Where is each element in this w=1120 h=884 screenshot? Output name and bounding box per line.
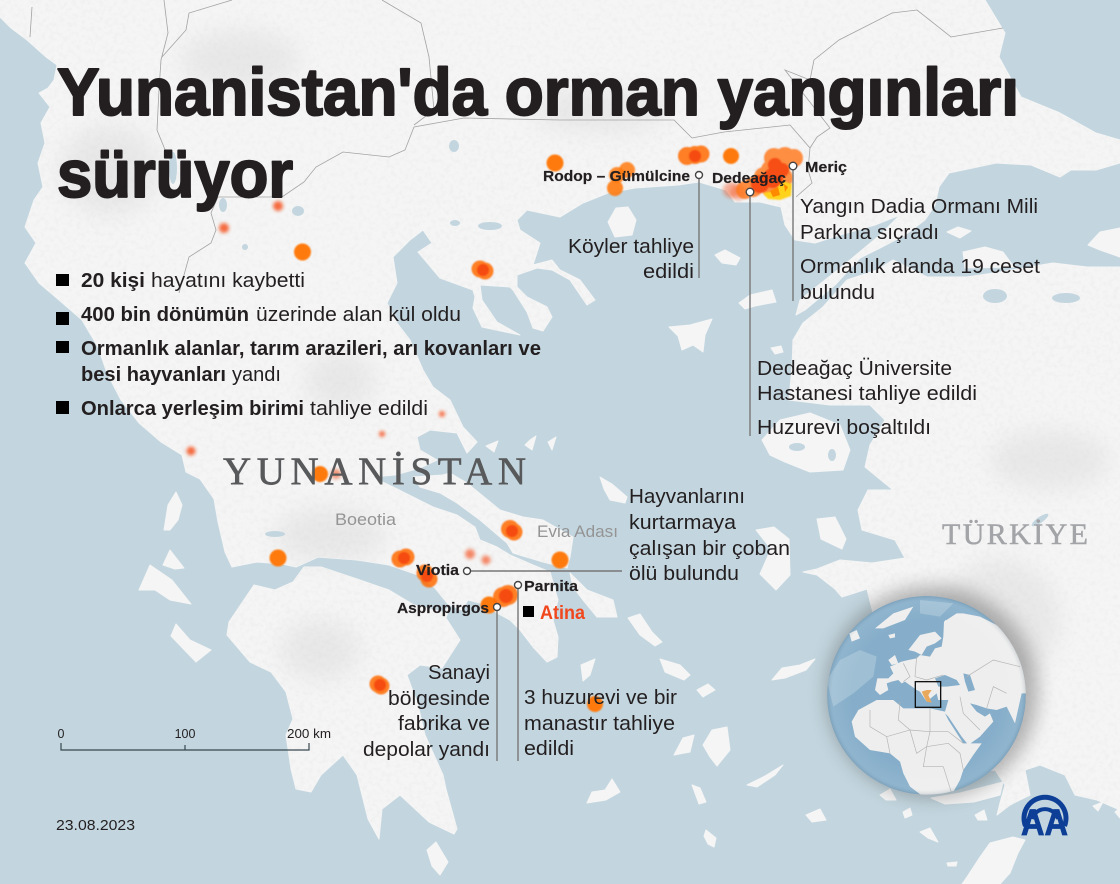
- bullet list: besi hayvanları: [81, 364, 226, 386]
- bullet list: yandı: [232, 364, 281, 386]
- scale bar: [58, 727, 331, 750]
- date: 23.08.2023: [56, 818, 135, 834]
- bullet list: hayatını kaybetti: [151, 270, 305, 292]
- callout: Aspropirgos: depolar yandı: [363, 739, 490, 761]
- callout: Meriç: Meriç: [805, 159, 847, 176]
- callout: Parnita: Parnita: [524, 578, 579, 595]
- bullet list: 400 bin dönümün: [81, 304, 249, 326]
- callout: Dedeağaç: Huzurevi boşaltıldı: [757, 417, 931, 439]
- callout: Aspropirgos: bölgesinde: [388, 688, 490, 710]
- callout: Viotia: ölü bulundu: [629, 563, 739, 585]
- fire hotspots: [186, 146, 803, 712]
- callout: Viotia: Viotia: [416, 562, 460, 579]
- bullet list: 20 kişi: [81, 270, 145, 292]
- callout: Dedeağaç: Dedeağaç Üniversite: [757, 358, 952, 380]
- Anadolu Agency logo: AA: [1021, 802, 1068, 843]
- callout: Parnita: manastır tahliye: [524, 713, 675, 735]
- bullet list: Onlarca yerleşim birimi: [81, 398, 304, 420]
- locator globe: [826, 586, 1038, 798]
- bullet list: tahliye edildi: [310, 398, 428, 420]
- callout: Parnita: edildi: [524, 738, 574, 760]
- scale bar: 0: [58, 727, 65, 741]
- callout: Rodop – Gümülcine: Köyler tahliye: [568, 236, 694, 258]
- region label: Evia Adası: Evia Adası: [537, 522, 618, 541]
- map: country borders: [30, 0, 1003, 293]
- title: Yunanistan'da orman yangınları: [57, 55, 1019, 130]
- bullet list: Ormanlık alanlar, tarım arazileri, arı kovanları ve: [81, 338, 541, 360]
- title: [57, 55, 1019, 212]
- callout: Meriç: Yangın Dadia Ormanı Mili: [800, 196, 1038, 218]
- country label: Yunanistan: YUNANİSTAN: [223, 450, 526, 493]
- scale bar: 200 km: [287, 727, 331, 741]
- callout: Dedeağaç: Hastanesi tahliye edildi: [757, 383, 977, 405]
- callout: Dedeağaç: Dedeağaç: [712, 170, 786, 187]
- callout: Aspropirgos: fabrika ve: [398, 713, 490, 735]
- region label: Boeotia: Boeotia: [335, 510, 397, 529]
- callout: Meriç: Ormanlık alanda 19 ceset: [800, 256, 1040, 278]
- callout: Rodop – Gümülcine: Rodop – Gümülcine: [543, 168, 690, 185]
- title: sürüyor: [57, 137, 293, 212]
- callout: Rodop – Gümülcine: edildi: [643, 261, 694, 283]
- bullet list: [56, 270, 541, 420]
- scale bar: 100: [175, 727, 195, 741]
- map: islands: [139, 207, 1120, 884]
- callout: Viotia: kurtarmaya: [629, 512, 737, 534]
- callout: Aspropirgos: [363, 600, 500, 761]
- callout: Viotia: Hayvanlarını: [629, 486, 745, 508]
- callout: Rodop – Gümülcine: [543, 168, 702, 283]
- callout: Viotia: [416, 486, 790, 585]
- callout: Viotia: çalışan bir çoban: [629, 538, 790, 560]
- callout: Parnita: [514, 578, 677, 761]
- bullet list: üzerinde alan kül oldu: [256, 304, 461, 326]
- city marker: Atina: Atina: [540, 603, 585, 624]
- callout: Aspropirgos: Aspropirgos: [397, 600, 489, 617]
- callout: Aspropirgos: Sanayi: [428, 662, 490, 684]
- callout: Meriç: [789, 159, 1040, 304]
- callout: Dedeağaç: [712, 170, 977, 439]
- callout: Parnita: 3 huzurevi ve bir: [524, 687, 677, 709]
- map: lakes: [169, 140, 1080, 537]
- callout: Meriç: Parkına sıçradı: [800, 222, 939, 244]
- country label: Türkiye: TÜRKİYE: [942, 518, 1088, 551]
- callout: Meriç: bulundu: [800, 282, 875, 304]
